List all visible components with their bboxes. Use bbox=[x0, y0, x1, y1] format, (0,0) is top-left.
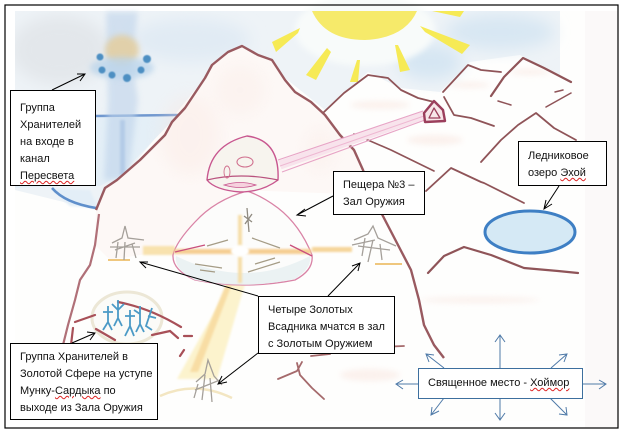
callout: guardians in golden sphere: Группа Хранителей в bbox=[20, 351, 128, 363]
callout: guardians in golden sphere: Мунку-Сардыка по bbox=[20, 385, 116, 397]
callout: cave no. 3: Пещера №3 – bbox=[343, 179, 414, 191]
callout: glacier lake: Ледниковое bbox=[528, 150, 589, 162]
callout: sacred place: Священное место - Хоймор bbox=[428, 377, 569, 389]
cave hall of weapons bbox=[173, 191, 312, 285]
sun bbox=[272, 0, 470, 82]
golden light beams bbox=[108, 246, 402, 398]
callout: guardians at channel entrance: канал bbox=[20, 153, 50, 165]
callout: guardians at channel entrance: Пересвета bbox=[20, 170, 74, 182]
callout: four golden riders: Четыре Золотых bbox=[268, 304, 353, 316]
main mountain bbox=[63, 46, 444, 372]
sky wash bbox=[10, 11, 560, 210]
water body at left bbox=[15, 115, 178, 208]
background ridges bbox=[278, 58, 578, 399]
callout: guardians in golden sphere bbox=[10, 343, 158, 420]
callout: guardians at channel entrance bbox=[10, 90, 96, 186]
callout: guardians at channel entrance: на входе в bbox=[20, 136, 74, 148]
arrows: black pointers bbox=[52, 74, 559, 384]
callout: guardians in golden sphere: выходе из Зала Оружия bbox=[20, 402, 143, 414]
guardians in golden sphere bbox=[71, 292, 192, 356]
callout: sacred place bbox=[418, 368, 583, 399]
callout: guardians at channel entrance: Группа bbox=[20, 102, 55, 114]
golden riders bbox=[110, 208, 396, 402]
callout: guardians at channel entrance: Хранителей bbox=[20, 119, 81, 131]
callout: cave no. 3: Зал Оружия bbox=[343, 196, 405, 208]
arrows: radiating blue bbox=[396, 335, 606, 420]
callout: glacier lake: озеро Эхой bbox=[528, 167, 586, 179]
glacier lake bbox=[485, 211, 575, 253]
callout: four golden riders: с Золотым Оружием bbox=[268, 338, 372, 350]
small cave entrance bbox=[424, 101, 445, 122]
callout: four golden riders: Всадника мчатся в зал bbox=[268, 321, 385, 333]
tunnel to small cave bbox=[278, 111, 425, 172]
waterfall light channel with guardians bbox=[90, 12, 154, 180]
callout: cave no. 3 bbox=[333, 171, 425, 215]
callout: four golden riders bbox=[258, 296, 395, 354]
distant hill pencil hatching bbox=[340, 69, 550, 381]
callout: guardians in golden sphere: Золотой Сфере на уступе bbox=[20, 368, 152, 380]
callout: glacier lake bbox=[518, 141, 607, 186]
upper dome chamber bbox=[207, 136, 278, 192]
